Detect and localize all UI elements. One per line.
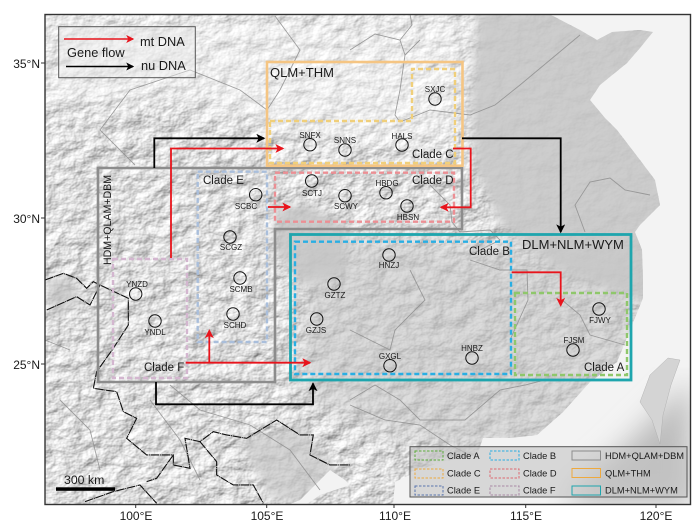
clade A box xyxy=(515,293,627,375)
ocean depth shading xyxy=(560,380,691,504)
axis: latitude and longitude labels: 120°E xyxy=(640,509,672,523)
site labels: SXJC xyxy=(425,85,445,94)
sampling sites xyxy=(130,93,605,372)
clade B box xyxy=(295,242,511,374)
region legend: Clade D xyxy=(523,468,557,478)
region legend: Clade A xyxy=(447,451,480,461)
region and clade labels: DLM+NLM+WYM xyxy=(522,237,624,252)
scale bar xyxy=(56,473,115,491)
site labels: GZTZ xyxy=(325,291,346,300)
gene flow legend: mt DNA xyxy=(140,34,185,49)
site labels: FJWY xyxy=(589,316,612,325)
site labels: HNBZ xyxy=(461,344,483,353)
arrow: mt DNA clade C to clade D xyxy=(441,148,471,207)
international border xyxy=(45,273,350,503)
arrow: nu DNA to QLM+THM xyxy=(154,138,264,168)
region and clade labels: Clade A xyxy=(584,362,625,374)
site labels xyxy=(126,85,612,361)
clade D box xyxy=(275,173,454,222)
arrow: nu DNA to DLM+NLM+WYM xyxy=(462,138,561,232)
arrow: mt DNA to clade C xyxy=(171,148,283,258)
region legend: Clade B xyxy=(523,451,556,461)
arrow: nu DNA from HDM to DLM xyxy=(156,382,313,404)
site labels: FJSM xyxy=(564,336,585,345)
clade F box xyxy=(113,259,187,378)
region legend: Clade E xyxy=(447,486,480,496)
site labels: GXGL xyxy=(379,352,402,361)
region legend xyxy=(410,447,687,497)
arrow: mt DNA from clade F to clade E xyxy=(208,330,210,363)
region and clade labels: Clade E xyxy=(203,175,244,187)
clade E box xyxy=(198,172,267,342)
site labels: YNZD xyxy=(126,280,148,289)
axis: latitude and longitude labels: 35°N xyxy=(13,57,40,71)
region: QLM+THM xyxy=(267,62,462,166)
Taiwan xyxy=(640,358,680,444)
region and clade labels: QLM+THM xyxy=(270,65,334,80)
clade C box xyxy=(270,69,455,163)
site labels: SCHD xyxy=(224,321,247,330)
rivers and provincial borders xyxy=(45,14,650,490)
region legend: HDM+QLAM+DBM xyxy=(605,451,684,461)
axis: latitude and longitude labels: 100°E xyxy=(120,509,152,523)
scale bar: 300 km xyxy=(64,473,104,487)
region and clade labels: Clade F xyxy=(144,362,184,374)
region legend: QLM+THM xyxy=(605,468,651,478)
site labels: SCWY xyxy=(334,202,359,211)
region and clade labels: Clade D xyxy=(412,175,454,187)
arrow: mt DNA to clade D xyxy=(268,206,290,208)
site labels: HNZJ xyxy=(379,261,399,270)
site labels: SCBC xyxy=(235,202,257,211)
site labels: SCTJ xyxy=(302,189,322,198)
site labels: SCGZ xyxy=(220,243,242,252)
region and clade labels: HDM+QLAM+DBM xyxy=(102,175,114,265)
axis: latitude and longitude labels: 115°E xyxy=(510,509,542,523)
gene flow legend xyxy=(59,27,195,78)
site labels: HBSN xyxy=(397,213,419,222)
arrow: mt DNA from clade F to clade B xyxy=(186,362,310,364)
axis: latitude and longitude labels: 25°N xyxy=(13,358,40,372)
region legend: DLM+NLM+WYM xyxy=(605,486,678,496)
arrow: mt DNA from clade B to clade A xyxy=(512,272,561,306)
site labels: YNDL xyxy=(144,328,166,337)
site labels: HALS xyxy=(392,132,412,141)
region and clade labels: Clade C xyxy=(412,149,454,161)
site labels: SNFX xyxy=(299,131,321,140)
region and clade labels: Clade B xyxy=(469,246,510,258)
axis: latitude and longitude labels: 105°E xyxy=(251,509,283,523)
site labels: HBDG xyxy=(375,179,399,188)
region: DLM+NLM+WYM xyxy=(290,234,631,380)
site labels: SCMB xyxy=(229,285,253,294)
region legend: Clade F xyxy=(523,486,556,496)
region: HDM+QLAM+DBM xyxy=(98,168,462,382)
site labels: SNNS xyxy=(334,136,356,145)
gene flow legend: Gene flow xyxy=(67,45,125,60)
axis: latitude and longitude labels: 30°N xyxy=(13,212,40,226)
site labels: GZJS xyxy=(306,326,326,335)
gene flow legend: nu DNA xyxy=(141,58,186,73)
region and clade labels xyxy=(102,65,625,374)
axis: latitude and longitude labels: 110°E xyxy=(379,509,411,523)
region legend: Clade C xyxy=(447,468,481,478)
